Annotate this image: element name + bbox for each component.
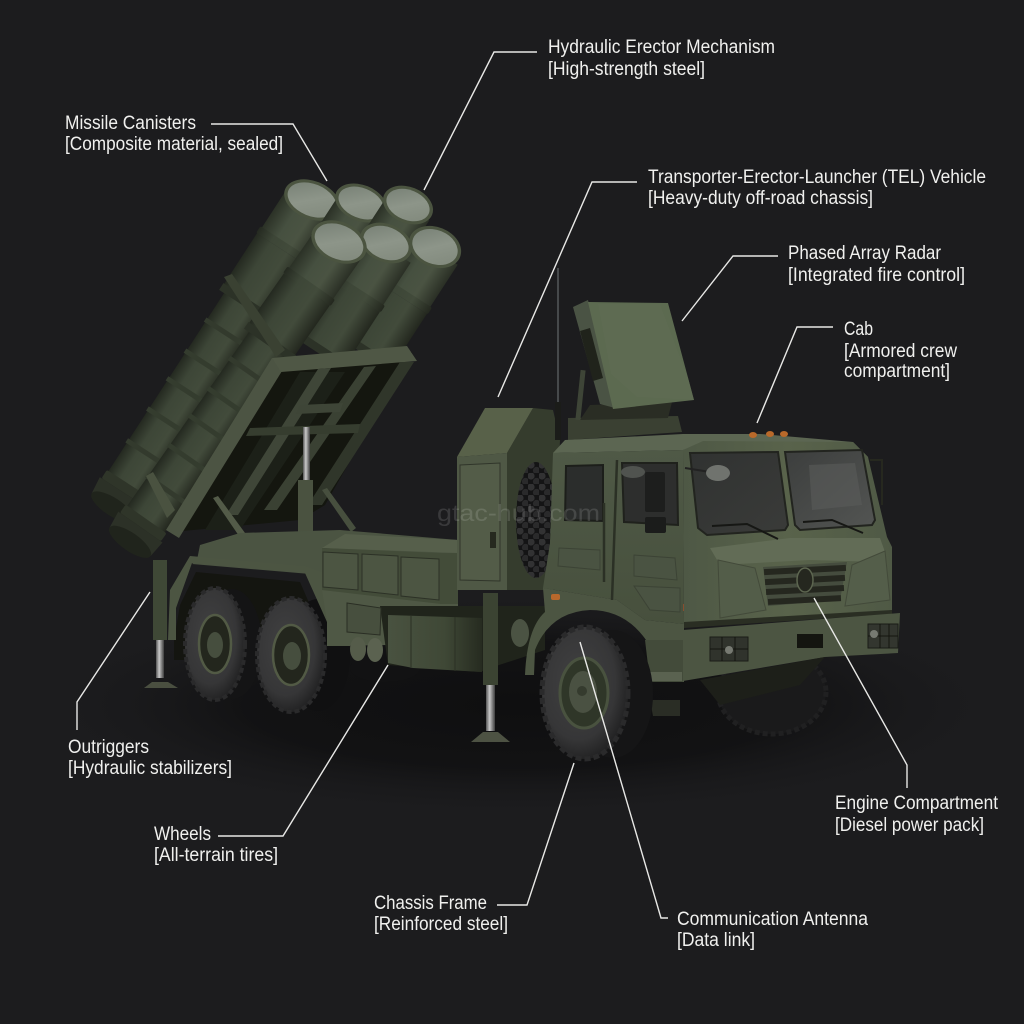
hood panel [710,538,885,565]
rear outrigger [144,560,178,688]
callout: phased array radar [682,243,965,321]
radar vent [580,328,603,381]
fuel tank [388,615,482,672]
lower bracket [146,472,175,518]
front orange light [683,604,691,611]
launcher frame [146,274,417,538]
callout: missile canisters: [Composite material, sealed] [65,134,283,155]
back right canister [325,193,431,316]
rear chassis [174,530,458,660]
small cylinders [350,637,383,662]
round air cylinder [511,619,529,647]
callout: communication antenna: Communication Antenna [677,909,868,930]
radar pedestal [568,370,682,440]
grille [763,562,847,606]
door panels [558,548,680,612]
cabinet handle [490,532,496,548]
erector piston rod [303,427,310,481]
radar side [573,300,615,408]
black mirror [645,472,665,512]
cab roof [553,434,868,457]
missile canisters [83,172,468,566]
callout: TEL vehicle: [Heavy-duty off-road chassis] [648,188,873,209]
callout: missile canisters [65,113,327,181]
wipers [712,520,863,539]
wheel arch cavity [174,572,330,660]
centre beam [226,368,331,515]
hydraulic erector mechanism [213,427,356,552]
bumper plate [797,634,823,648]
back middle canister [276,190,384,317]
right windshield [785,450,875,530]
front right cap [402,218,468,276]
hidden middle wheels [350,654,420,682]
rear fender and under body [168,556,545,672]
left headlight [710,637,748,661]
callout: hydraulic erector mechanism: [High-strength steel] [548,59,705,80]
callout: communication antenna: [Data link] [677,930,755,951]
callout: phased array radar: Phased Array Radar [788,243,942,264]
door window [622,463,678,525]
front left canister [101,225,364,566]
lower black mirror [645,517,666,533]
lower cab shadow [684,610,892,628]
callout: wheels [154,665,388,866]
cab front [683,441,892,624]
callout: engine compartment [814,598,999,836]
cabinet top [457,408,533,457]
rear wheel two [257,598,350,712]
front wheel [542,627,653,759]
radar face [588,302,694,409]
cab [543,431,900,705]
front fender and step [525,588,684,716]
callout: TEL vehicle [498,167,986,397]
callout: cab [757,319,957,423]
launcher vehicle illustration [83,172,900,759]
right beam [308,362,414,505]
callout: chassis frame [374,763,574,935]
tool box top [322,534,458,553]
under bumper [700,657,825,705]
callout: wheels: Wheels [154,824,211,845]
radar unit [568,300,694,440]
upper bracket [224,274,285,357]
back left canister [83,184,336,530]
equipment cabinet [457,408,560,590]
callout: cab: compartment] [844,361,950,382]
left windshield [690,452,788,535]
callout: missile canisters: Missile Canisters [65,113,196,134]
right mirror [685,465,730,481]
fender [168,556,350,646]
tool box doors [323,552,358,590]
ground shadow [20,590,1020,820]
front left cap [304,212,374,272]
radar face diagonal [598,304,694,400]
windshield reflection [809,463,862,510]
rear wheel one [185,588,262,700]
callout: outriggers [68,592,232,779]
door seam [604,460,617,600]
callout: outriggers: [Hydraulic stabilizers] [68,758,232,779]
middle beam [264,366,376,510]
side orange light [551,594,560,600]
amber roof lights [749,431,788,438]
right strut [322,488,356,532]
cabinet side [507,408,560,590]
callout: TEL vehicle: Transporter-Erector-Launcher (TEL) Vehicle [648,167,986,188]
left beam [166,358,282,538]
callout: engine compartment: Engine Compartment [835,793,999,814]
callout: chassis frame: Chassis Frame [374,893,487,914]
callout: cab: [Armored crew [844,341,957,362]
watermark: gtac-hub.com [437,500,600,526]
right vent panel [845,551,890,606]
steps [645,640,683,682]
erector piston base [298,480,313,538]
inner missile bodies [205,372,345,530]
right headlight [868,624,898,648]
back right cap [377,179,439,231]
rear wheels [185,588,350,712]
dark under tool box [380,606,545,672]
flat bed [192,530,458,575]
spare tire [516,462,556,578]
tool box body [322,548,458,604]
callout: engine compartment: [Diesel power pack] [835,815,984,836]
callout: hydraulic erector mechanism: Hydraulic Erector Mechanism [548,37,775,58]
rear window [565,465,603,521]
callout: outriggers: Outriggers [68,737,149,758]
communication antenna mast [555,268,561,440]
back middle cap [329,176,393,230]
cabinet door [460,463,500,581]
callout: chassis frame: [Reinforced steel] [374,914,508,935]
left mirror [621,466,645,478]
front right canister [342,234,459,371]
back left cap [278,172,346,228]
front wheel arch [525,588,684,682]
left vent panel [718,560,766,618]
callout: phased array radar: [Integrated fire control] [788,265,965,286]
callout: communication antenna [580,642,868,951]
bumper [683,613,900,681]
far front wheel [718,650,826,734]
front middle canister [295,232,412,369]
callout: cab: Cab [844,319,873,340]
far side mirror frame [870,460,882,505]
cross member upper [296,403,343,414]
under body [322,590,458,646]
front middle cap [354,215,418,271]
callout: wheels: [All-terrain tires] [154,845,278,866]
mid outrigger [471,593,510,742]
cabinet front [457,453,507,590]
frame backing [172,352,412,532]
cab side [543,450,684,624]
cross member lower [246,424,360,436]
top beam [272,346,417,372]
rear bracket box [347,603,381,635]
callout: hydraulic erector mechanism [424,37,775,190]
tool box [322,534,458,604]
left strut [213,496,256,552]
